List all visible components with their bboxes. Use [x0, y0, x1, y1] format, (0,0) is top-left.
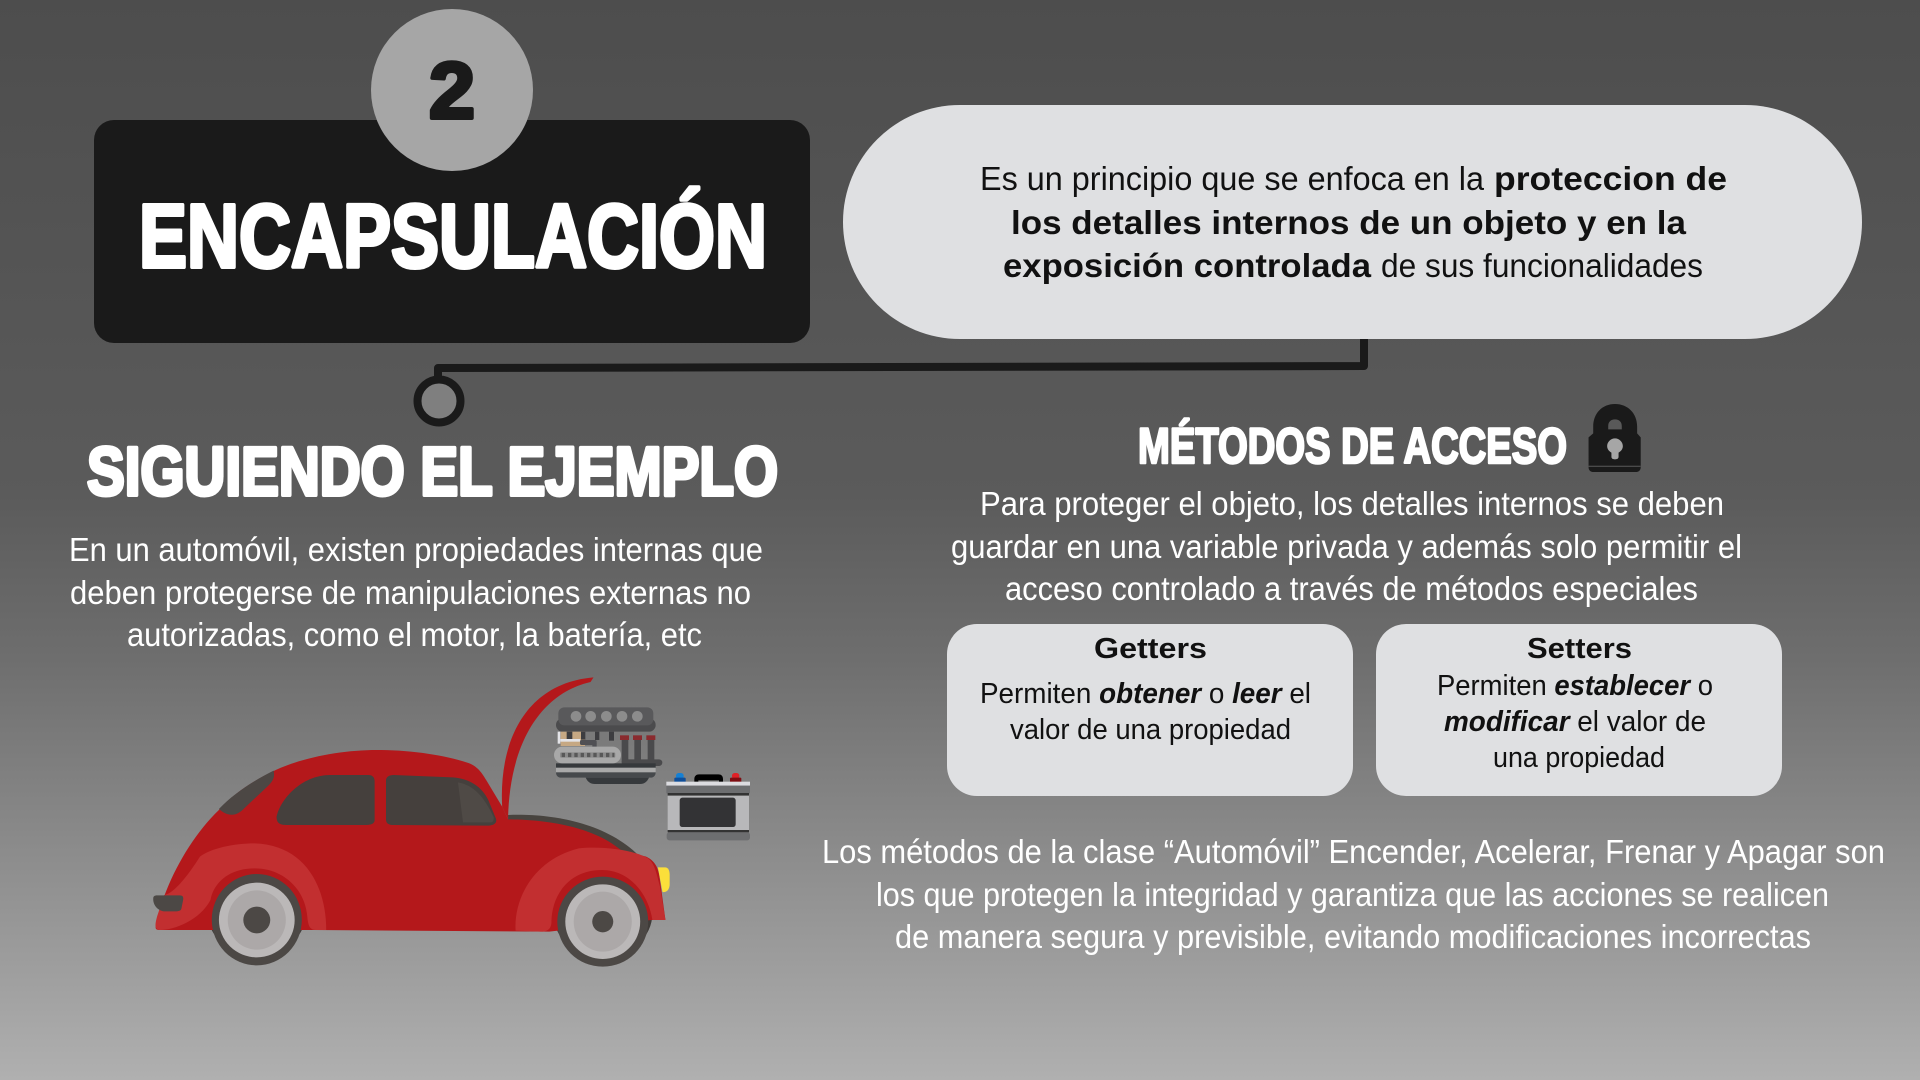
rear side window [219, 771, 274, 815]
headlight [658, 867, 670, 892]
definition text: proteccion de [1494, 160, 1727, 197]
tail light [153, 895, 183, 911]
setters text: una propiedad [1493, 742, 1665, 774]
icon: engine [554, 707, 662, 784]
closing text: de manera segura y previsible, evitando modificaciones incorrectas [895, 918, 1811, 955]
rear wheel [212, 874, 302, 965]
definition text [980, 160, 1727, 284]
methods text: guardar en una variable privada y además solo permitir el [951, 528, 1742, 565]
connector node [418, 380, 460, 422]
panel: setters [1376, 624, 1782, 796]
heading: métodos de acceso: MÉTODOS DE ACCESO [1138, 418, 1567, 474]
definition text: Es un principio que se enfoca en la [980, 160, 1485, 197]
front wheel [557, 877, 648, 967]
wheel arches [207, 868, 306, 956]
car body [156, 750, 665, 932]
setters title: Setters [1527, 633, 1632, 665]
connector line [438, 338, 1364, 380]
getters text: valor de una propiedad [1010, 714, 1291, 746]
panel: getters [947, 624, 1353, 796]
getters text [980, 678, 1311, 746]
front fender [515, 848, 665, 932]
closing text [822, 833, 1885, 955]
methods text [951, 485, 1742, 607]
definition pill [843, 105, 1862, 339]
example text: autorizadas, como el motor, la batería, etc [127, 616, 702, 653]
getters title: Getters [1094, 633, 1207, 665]
dark hood gap [508, 815, 640, 857]
definition text: de sus funcionalidades [1381, 247, 1703, 284]
icon: battery [666, 773, 750, 840]
open hood [502, 677, 593, 819]
title: encapsulación: ENCAPSULACIÓN [139, 186, 767, 287]
number badge [371, 9, 533, 171]
title panel [94, 120, 810, 343]
example text [69, 531, 763, 653]
setters text [1437, 670, 1713, 774]
heading: siguiendo el ejemplo: SIGUIENDO EL EJEMPLO [87, 433, 778, 510]
methods text: acceso controlado a través de métodos especiales [1005, 570, 1698, 607]
setters text: modificar el valor de [1444, 706, 1706, 738]
getters text: Permiten obtener o leer el [980, 678, 1311, 710]
definition text: los detalles internos de un objeto y en la [1011, 204, 1687, 241]
example text: deben protegerse de manipulaciones externas no [70, 574, 751, 611]
setters text: Permiten establecer o [1437, 670, 1713, 702]
definition text: exposición controlada [1003, 247, 1372, 284]
rear fender [155, 843, 326, 930]
number badge: 2 [429, 46, 475, 135]
illustration: car with open hood [153, 677, 670, 967]
closing text: los que protegen la integridad y garantiza que las acciones se realicen [876, 876, 1829, 913]
front window [386, 775, 496, 826]
rear window [277, 775, 375, 825]
icon: padlock [1589, 404, 1641, 472]
methods text: Para proteger el objeto, los detalles internos se deben [980, 485, 1724, 522]
example text: En un automóvil, existen propiedades internas que [69, 531, 763, 568]
